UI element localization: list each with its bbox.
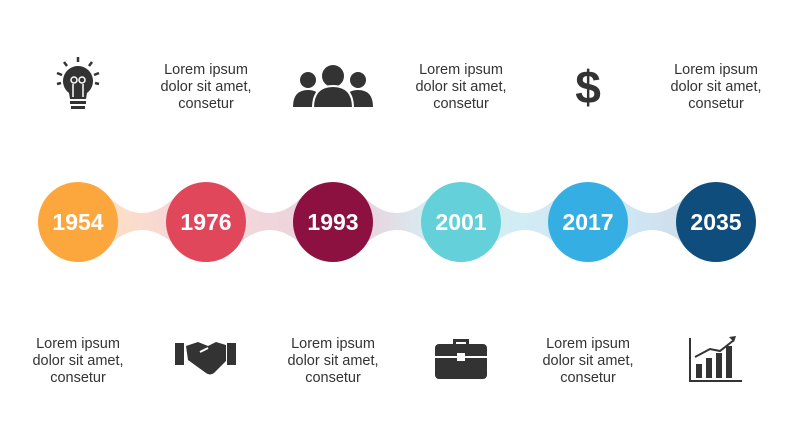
- text top 2: Lorem ipsum: [419, 62, 503, 78]
- text top 2: dolor sit amet,: [415, 79, 507, 95]
- text top 3: consetur: [688, 96, 744, 112]
- circle 1954: [38, 182, 118, 262]
- circle 2035: [676, 182, 756, 262]
- circle 2001: [421, 182, 501, 262]
- text top 2: [415, 62, 507, 112]
- text bottom 1: Lorem ipsum: [36, 336, 120, 352]
- text top 3: [670, 62, 762, 112]
- circle 1993: [293, 182, 373, 262]
- icon: people: [293, 65, 373, 108]
- text bottom 2: consetur: [305, 370, 361, 386]
- text bottom 2: Lorem ipsum: [291, 336, 375, 352]
- text top 3: Lorem ipsum: [674, 62, 758, 78]
- text top 2: consetur: [433, 96, 489, 112]
- text top 3: dolor sit amet,: [670, 79, 762, 95]
- text bottom 2: [287, 336, 379, 386]
- text bottom 2: dolor sit amet,: [287, 353, 379, 369]
- icon: handshake: [175, 342, 236, 374]
- text bottom 3: consetur: [560, 370, 616, 386]
- icon: lightbulb: [57, 57, 99, 109]
- text bottom 1: [32, 336, 124, 386]
- circle 2017: 2017: [562, 209, 614, 235]
- circle 2001: 2001: [435, 209, 487, 235]
- text bottom 1: dolor sit amet,: [32, 353, 124, 369]
- circle 1954: 1954: [52, 209, 104, 235]
- icon: briefcase: [435, 339, 487, 379]
- circle 2017: [548, 182, 628, 262]
- text bottom 1: consetur: [50, 370, 106, 386]
- text top 1: [160, 62, 252, 112]
- circle 2035: 2035: [690, 209, 742, 235]
- text bottom 3: Lorem ipsum: [546, 336, 630, 352]
- text bottom 3: dolor sit amet,: [542, 353, 634, 369]
- circle 1976: 1976: [180, 209, 232, 235]
- text top 1: Lorem ipsum: [164, 62, 248, 78]
- text top 1: dolor sit amet,: [160, 79, 252, 95]
- text top 1: consetur: [178, 96, 234, 112]
- text bottom 3: [542, 336, 634, 386]
- connectors: [108, 196, 686, 246]
- circle 1976: [166, 182, 246, 262]
- circle 1993: 1993: [307, 209, 359, 235]
- icon: dollar: $: [575, 61, 601, 113]
- icon: chart: [690, 336, 742, 381]
